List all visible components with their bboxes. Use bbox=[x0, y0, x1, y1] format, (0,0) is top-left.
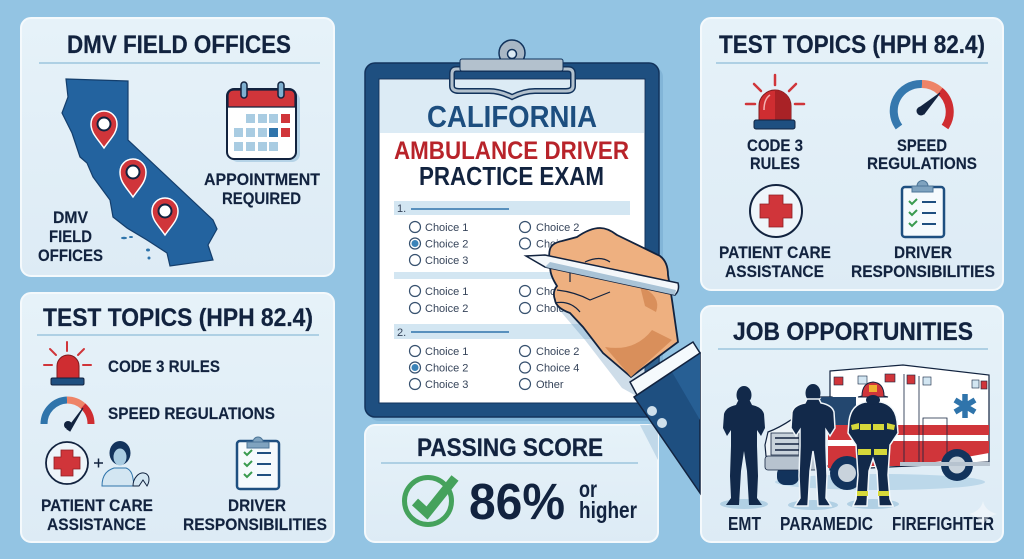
label: driver responsibilities: RESPONSIBILITIES bbox=[851, 262, 995, 281]
label: patient care assistance bbox=[719, 243, 831, 281]
label: patient care assistance: ASSISTANCE bbox=[47, 515, 146, 534]
question 2: Other bbox=[536, 379, 564, 391]
exam title: CALIFORNIA bbox=[427, 99, 597, 134]
illustration: hand holding pen bbox=[526, 228, 700, 493]
icon: medical cross bbox=[750, 185, 802, 237]
question 1: Choice 3 bbox=[425, 255, 468, 267]
label: speed regulations: REGULATIONS bbox=[867, 154, 977, 173]
sleeve bbox=[634, 353, 700, 493]
question 1: Choice 4 bbox=[536, 238, 579, 250]
icon: speed gauge bbox=[894, 84, 950, 127]
panel: test topics left bbox=[21, 293, 334, 542]
label: patient care assistance: PATIENT CARE bbox=[719, 243, 831, 262]
map: California bbox=[62, 79, 217, 266]
label: patient care assistance: PATIENT CARE bbox=[41, 496, 153, 515]
heading: passing score: PASSING SCORE bbox=[417, 434, 603, 462]
exam title: AMBULANCE DRIVER bbox=[394, 137, 629, 165]
label: code 3 rules: CODE 3 RULES bbox=[108, 357, 220, 376]
question 1: Choice 2 bbox=[536, 222, 579, 234]
clipboard with practice exam bbox=[365, 40, 663, 421]
figure: paramedic bbox=[788, 384, 838, 510]
label: DMV field offices: OFFICES bbox=[38, 246, 103, 265]
question 1: 1. bbox=[397, 203, 406, 215]
label: DMV field offices: FIELD bbox=[49, 227, 92, 246]
panel: DMV field offices bbox=[21, 18, 334, 276]
exam title bbox=[394, 99, 629, 191]
label: or higher bbox=[579, 476, 637, 523]
icon: channel islands bbox=[121, 236, 150, 260]
labels: jobs: FIREFIGHTER bbox=[892, 514, 994, 534]
panel: job opportunities bbox=[701, 306, 1003, 542]
icon: siren bbox=[746, 75, 804, 129]
icon: green check bbox=[404, 478, 455, 524]
icon: sparkle watermark bbox=[969, 501, 997, 527]
icon: siren bbox=[44, 342, 91, 385]
label: driver responsibilities bbox=[851, 243, 995, 281]
label: DMV field offices bbox=[38, 208, 103, 265]
icon: clipboard checklist bbox=[237, 437, 279, 489]
icon: map pin 2 bbox=[120, 159, 146, 197]
heading: test topics: TEST TOPICS (HPH 82.4) bbox=[43, 304, 313, 332]
icon: calendar bbox=[227, 82, 300, 162]
question 1 continued: Choice 4 bbox=[536, 303, 579, 315]
question 2: Choice 4 bbox=[536, 362, 579, 374]
heading: test topics: TEST TOPICS (HPH 82.4) bbox=[719, 31, 985, 59]
pen bbox=[526, 255, 679, 295]
label: or higher: or bbox=[579, 476, 597, 502]
figure: EMT bbox=[720, 386, 768, 509]
panel: test topics right bbox=[701, 18, 1003, 290]
question 2: Choice 3 bbox=[425, 379, 468, 391]
label: patient care assistance bbox=[41, 496, 153, 534]
label: patient care assistance: ASSISTANCE bbox=[725, 262, 824, 281]
label: speed regulations: SPEED bbox=[897, 136, 947, 155]
icon: map pin 3 bbox=[152, 198, 178, 235]
icon: clipboard checklist bbox=[902, 181, 944, 237]
figure: firefighter bbox=[847, 382, 899, 509]
label: or higher: higher bbox=[579, 497, 637, 523]
cuff bbox=[630, 342, 700, 395]
exam title: PRACTICE EXAM bbox=[419, 161, 604, 191]
label: speed regulations: SPEED REGULATIONS bbox=[108, 404, 275, 423]
label: speed regulations bbox=[867, 136, 977, 173]
label: appointment required: APPOINTMENT bbox=[204, 170, 321, 189]
question 2 bbox=[394, 324, 630, 391]
label: code 3 rules: CODE 3 bbox=[747, 136, 803, 155]
label: appointment required: REQUIRED bbox=[222, 189, 301, 208]
question 1: Choice 2 bbox=[425, 238, 468, 250]
question 1: Choice 1 bbox=[425, 222, 468, 234]
question 2: 2. bbox=[397, 327, 406, 339]
question 1 continued bbox=[394, 272, 630, 315]
question 1 continued: Choice 2 bbox=[425, 303, 468, 315]
label: code 3 rules: RULES bbox=[750, 154, 800, 173]
label: driver responsibilities: DRIVER bbox=[228, 496, 286, 515]
question 1 bbox=[394, 201, 630, 267]
labels: jobs: EMT bbox=[728, 514, 761, 534]
label: driver responsibilities: DRIVER bbox=[894, 243, 952, 262]
icon: medical cross bbox=[46, 442, 88, 484]
score: 86%: 86% bbox=[469, 473, 565, 530]
panel: passing score bbox=[365, 425, 658, 542]
label: driver responsibilities: RESPONSIBILITIES bbox=[183, 515, 327, 534]
heading: DMV field offices: DMV FIELD OFFICES bbox=[67, 31, 291, 59]
icon: speed gauge bbox=[44, 400, 91, 431]
question 1 continued: Choice 3 bbox=[536, 286, 579, 298]
question 1 continued: Choice 1 bbox=[425, 286, 468, 298]
question 2: Choice 1 bbox=[425, 346, 468, 358]
labels: jobs bbox=[728, 514, 994, 534]
label: code 3 rules bbox=[747, 136, 803, 173]
question 2: Choice 2 bbox=[536, 346, 579, 358]
label: appointment required bbox=[204, 170, 321, 208]
labels: jobs: PARAMEDIC bbox=[780, 514, 873, 534]
clipboard clip bbox=[452, 40, 573, 97]
heading: job opportunities: JOB OPPORTUNITIES bbox=[733, 318, 973, 346]
label: DMV field offices: DMV bbox=[53, 208, 89, 227]
illustration: ambulance bbox=[765, 365, 990, 490]
icon: care assistant bbox=[94, 441, 149, 486]
icon: map pin 1 bbox=[91, 111, 117, 148]
question 2: Choice 2 bbox=[425, 362, 468, 374]
hand bbox=[549, 228, 678, 377]
label: driver responsibilities bbox=[183, 496, 327, 534]
